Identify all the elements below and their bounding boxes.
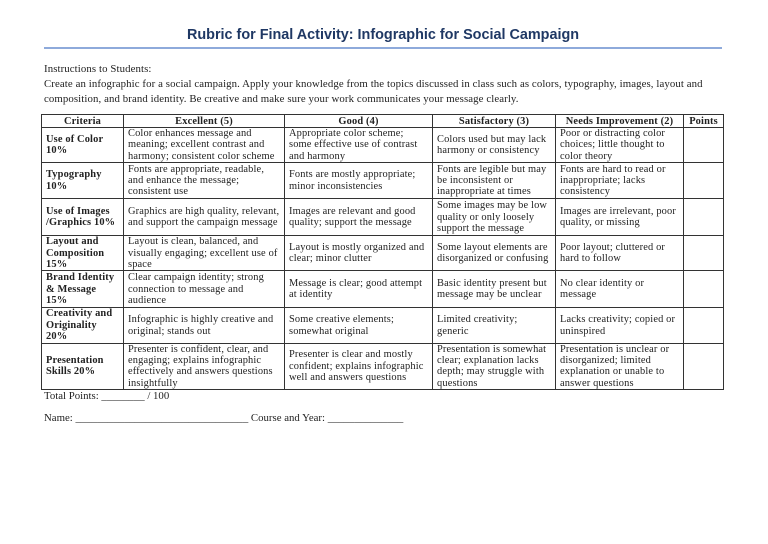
rubric table: Limited creativity; generic xyxy=(437,314,517,337)
rubric table: Criteria xyxy=(64,116,101,126)
rubric table: Layout and Composition 15% xyxy=(46,236,104,270)
rubric table: Excellent (5) xyxy=(175,116,233,126)
rubric table: Some creative elements; somewhat original xyxy=(289,314,394,337)
rubric table: Clear campaign identity; strong connection to message and audience xyxy=(128,272,264,306)
rubric table: Images are relevant and good quality; support the message xyxy=(289,206,416,228)
rubric table: Fonts are legible but may be inconsistent or inappropriate at times xyxy=(437,164,546,197)
rubric table: Color enhances message and meaning; excellent contrast and harmony; consistent color scheme xyxy=(128,128,274,162)
rubric table: Points xyxy=(689,116,718,126)
rubric table: Colors used but may lack harmony or consistency xyxy=(437,134,546,156)
rubric table: Images are irrelevant, poor quality, or missing xyxy=(560,206,676,228)
rubric table: Poor layout; cluttered or hard to follow xyxy=(560,242,665,264)
instructions: Instructions to Students: xyxy=(44,63,151,75)
rubric table: Presentation Skills 20% xyxy=(46,355,104,377)
rubric table: 10% xyxy=(46,181,67,192)
rubric table: Message is clear; good attempt at identity xyxy=(289,278,422,300)
rubric table: Needs Improvement (2) xyxy=(566,116,673,126)
rubric table: Graphics are high quality, relevant, and support the campaign message xyxy=(128,206,279,228)
rubric table xyxy=(41,114,724,390)
rubric table: Satisfactory (3) xyxy=(459,116,529,126)
rubric table: Layout is clean, balanced, and visually engaging; excellent use of space xyxy=(128,236,278,270)
rubric table: Brand Identity & Message 15% xyxy=(46,272,114,306)
rubric table: Fonts are mostly appropriate; minor inconsistencies xyxy=(289,169,415,192)
rubric table: Good (4) xyxy=(338,116,379,126)
rubric table: Some layout elements are disorganized or confusing xyxy=(437,242,548,264)
rubric table: Poor or distracting color choices; little thought to color theory xyxy=(560,128,665,162)
title: Rubric for Final Activity: Infographic for Social Campaign xyxy=(187,27,579,43)
rubric table: Typography xyxy=(46,169,102,180)
rubric table: Lacks creativity; copied or uninspired xyxy=(560,314,675,337)
rubric table: Infographic is highly creative and original; stands out xyxy=(128,314,273,337)
rubric table: Presentation is unclear or disorganized; limited explanation or unable to answer questions xyxy=(560,344,669,389)
rubric table: Creativity and Originality 20% xyxy=(46,308,112,342)
name line: Name: ________________________________ Course and Year: ______________ xyxy=(44,412,403,424)
rubric table: Presenter is clear and mostly confident; explains infographic well and answers questions xyxy=(289,349,424,383)
rubric table: Presentation is somewhat clear; explanation lacks depth; may struggle with questions xyxy=(437,344,546,389)
rubric table: Use of Images /Graphics 10% xyxy=(46,206,115,228)
rubric table: 10% xyxy=(46,145,67,156)
rubric table: Use of Color xyxy=(46,134,103,145)
rubric table: Appropriate color scheme; some effective use of contrast and harmony xyxy=(289,128,417,162)
rubric table: Some images may be low quality or only loosely support the message xyxy=(437,200,547,234)
instructions: Create an infographic for a social campaign. Apply your knowledge from the topics discussed in class such as colors, typography, images, layout and xyxy=(44,78,703,90)
instructions: composition, and brand identity. Be creative and make sure your work communicates your message clearly. xyxy=(44,93,519,105)
rubric table: Fonts are hard to read or inappropriate; lacks consistency xyxy=(560,164,666,197)
instructions xyxy=(44,63,703,105)
rubric table: Basic identity present but message may be unclear xyxy=(437,278,547,300)
rubric table: Presenter is confident, clear, and engaging; explains infographic effectively and answers questions insightfully xyxy=(128,344,273,389)
rubric table: Fonts are appropriate, readable, and enhance the message; consistent use xyxy=(128,164,264,197)
rubric table: No clear identity or message xyxy=(560,278,644,300)
rubric table: Layout is mostly organized and clear; minor clutter xyxy=(289,242,424,264)
total points: Total Points: ________ / 100 xyxy=(44,390,169,402)
